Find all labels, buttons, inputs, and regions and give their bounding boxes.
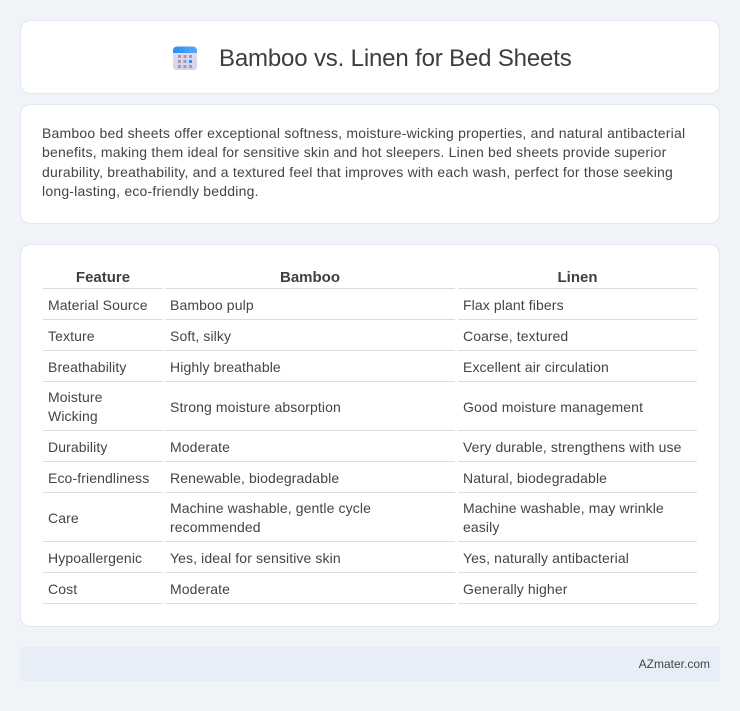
table header <box>76 269 598 286</box>
row: hypoallergenic: Yes, naturally antibacterial <box>463 550 629 566</box>
row: texture: Coarse, textured <box>463 328 568 344</box>
row: moisture wicking: Good moisture management <box>463 399 643 415</box>
row: breathability: Excellent air circulation <box>463 359 609 375</box>
row: breathability <box>48 359 609 375</box>
table header: Bamboo <box>280 269 340 286</box>
row: hypoallergenic: Hypoallergenic <box>48 550 142 566</box>
row: eco-friendliness: Eco-friendliness <box>48 470 149 486</box>
row: moisture wicking: Wicking <box>48 408 98 424</box>
summary text: long-lasting, eco-friendly bedding. <box>42 183 259 199</box>
row: hypoallergenic <box>48 550 629 566</box>
row: durability: Very durable, strengthens with use <box>463 439 682 455</box>
row: cost: Cost <box>48 581 77 597</box>
row: care: recommended <box>170 519 261 535</box>
table card <box>20 244 720 627</box>
row: texture: Texture <box>48 328 95 344</box>
summary text <box>42 125 685 199</box>
row: texture <box>48 328 568 344</box>
row: moisture wicking: Moisture <box>48 389 103 405</box>
row: hypoallergenic: Yes, ideal for sensitive skin <box>170 550 341 566</box>
table header: Feature <box>76 269 130 286</box>
row: care: Machine washable, may wrinkle <box>463 500 664 516</box>
row: eco-friendliness <box>48 470 607 486</box>
row: moisture wicking: Strong moisture absorption <box>170 399 341 415</box>
summary text: benefits, making them ideal for sensitive skin and hot sleepers. Linen bed sheets provide superior <box>42 144 666 160</box>
row: material source: Flax plant fibers <box>463 297 564 313</box>
footer bar <box>20 647 720 681</box>
row: eco-friendliness: Natural, biodegradable <box>463 470 607 486</box>
row: material source: Material Source <box>48 297 148 313</box>
row: care <box>48 500 664 535</box>
row: eco-friendliness: Renewable, biodegradable <box>170 470 339 486</box>
summary text: durability, breathability, and a textured feel that improves with each wash, perfect for those seeking <box>42 164 673 180</box>
row: breathability: Breathability <box>48 359 126 375</box>
row: breathability: Highly breathable <box>170 359 281 375</box>
row: material source: Bamboo pulp <box>170 297 254 313</box>
title card <box>20 20 720 94</box>
icon: calendar <box>173 46 197 70</box>
row: care: easily <box>463 519 499 535</box>
row: care: Care <box>48 510 79 526</box>
row: durability <box>48 439 682 455</box>
row: texture: Soft, silky <box>170 328 231 344</box>
row: care: Machine washable, gentle cycle <box>170 500 371 516</box>
row: material source <box>48 297 564 313</box>
row: moisture wicking <box>48 389 643 424</box>
row: cost <box>48 581 568 597</box>
table header: Linen <box>558 269 598 286</box>
row: cost: Generally higher <box>463 581 567 597</box>
title: Bamboo vs. Linen for Bed Sheets <box>219 45 572 72</box>
row: cost: Moderate <box>170 581 230 597</box>
summary card <box>20 104 720 224</box>
row: durability: Moderate <box>170 439 230 455</box>
footer credit: AZmater.com <box>639 657 710 671</box>
summary text: Bamboo bed sheets offer exceptional softness, moisture-wicking properties, and natural antibacterial <box>42 125 685 141</box>
row: durability: Durability <box>48 439 107 455</box>
